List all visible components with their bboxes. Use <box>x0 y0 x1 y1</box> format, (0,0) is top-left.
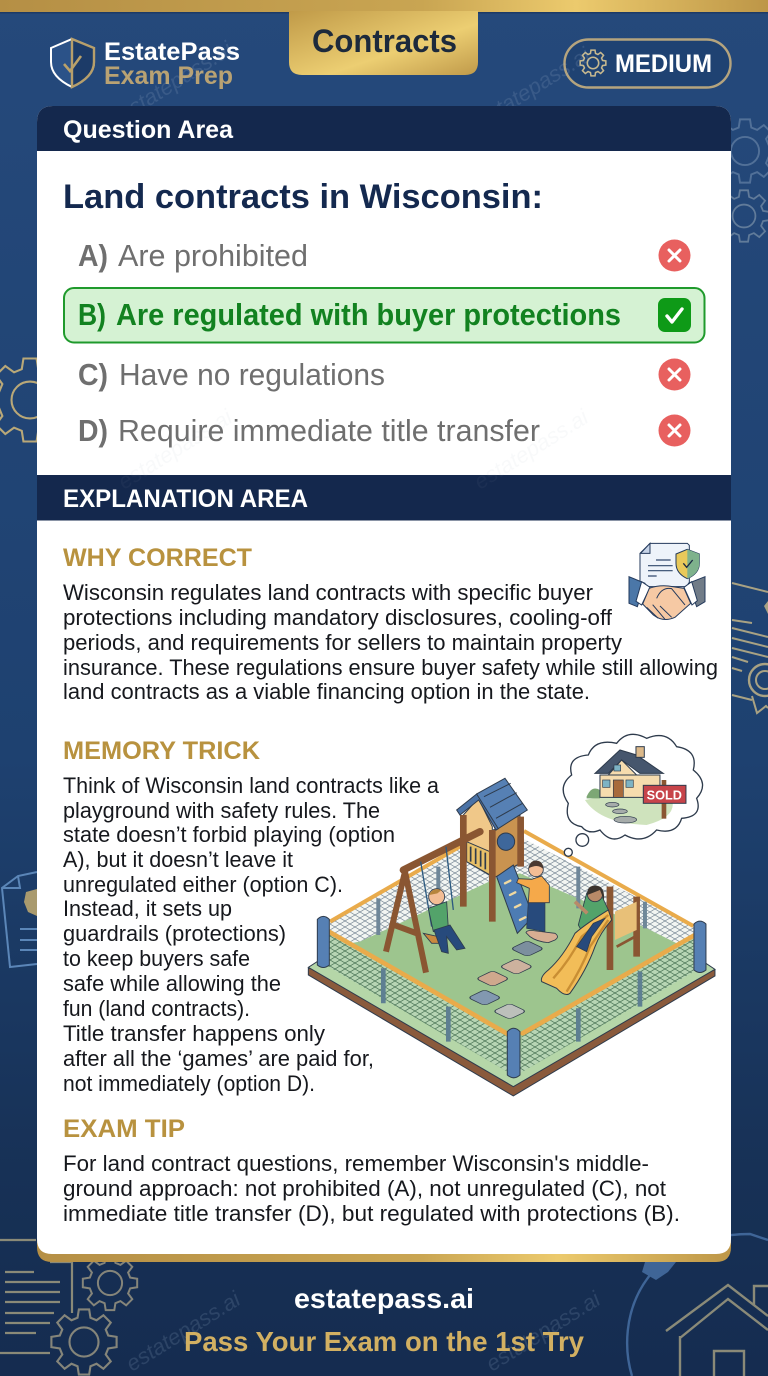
icon: correct <box>658 298 691 332</box>
text: exam tip: immediate title transfer (D), but regulated with protections (B). <box>63 1201 680 1226</box>
faint watermarks on panel: estatepass.ai <box>113 404 238 494</box>
text: memory trick: not immediately (option D). <box>63 1071 315 1096</box>
person on wall <box>517 861 557 943</box>
explanation area header <box>37 475 731 520</box>
option A: Are prohibited <box>118 238 308 273</box>
climbing wall <box>497 865 533 933</box>
slide and climber <box>541 886 637 995</box>
text: memory trick: state doesn’t forbid playing (option <box>63 822 395 847</box>
top gold bar <box>0 0 768 14</box>
text: memory trick: to keep buyers safe <box>63 946 250 971</box>
icon: wrong <box>658 240 690 272</box>
gold panel base <box>37 1230 731 1262</box>
option B correct <box>64 288 704 342</box>
option A <box>78 238 690 273</box>
option B correct: B) <box>78 297 106 332</box>
footer website: estatepass.ai <box>294 1283 474 1314</box>
question area header: Question Area <box>63 116 234 144</box>
option D: D) <box>78 413 108 448</box>
heading: memory trick: MEMORY TRICK <box>63 737 260 765</box>
watermarks on background: estatepass.ai <box>121 1286 246 1376</box>
tower roof <box>457 778 527 830</box>
brand logo <box>51 38 240 90</box>
thought bubble <box>563 734 703 856</box>
swing set <box>386 832 480 973</box>
option C: C) <box>78 357 108 392</box>
icon: wrong <box>658 358 690 390</box>
text: memory trick: guardrails (protections) <box>63 921 286 946</box>
icon: handshake and contract <box>629 543 705 620</box>
watermarks on background: estatepass.ai <box>471 42 596 132</box>
text: why correct: periods, and requirements for sellers to maintain property <box>63 630 623 655</box>
heading: why correct: WHY CORRECT <box>63 544 252 572</box>
text: why correct: insurance. These regulations ensure buyer safety while still allowing <box>63 655 718 680</box>
text: memory trick: Think of Wisconsin land contracts like a <box>63 773 439 798</box>
back fence <box>330 831 697 953</box>
difficulty badge: MEDIUM <box>615 50 712 78</box>
footer tagline: Pass Your Exam on the 1st Try <box>184 1326 584 1357</box>
text: why correct: Wisconsin regulates land contracts with specific buyer <box>63 580 593 605</box>
text: memory trick: after all the ‘games’ are paid for, <box>63 1046 374 1071</box>
text: memory trick: A), but it doesn’t leave it <box>63 847 294 872</box>
text: why correct <box>63 580 718 704</box>
brand name: EstatePass <box>104 38 240 66</box>
option B correct: Are regulated with buyer protections <box>116 297 621 332</box>
text: memory trick: fun (land contracts). <box>63 996 250 1021</box>
text: exam tip: For land contract questions, remember Wisconsin's middle- <box>63 1151 649 1176</box>
icon: shield <box>51 39 94 87</box>
front fence <box>326 930 700 1073</box>
faint watermarks on panel <box>113 404 594 494</box>
heading: exam tip: EXAM TIP <box>63 1115 185 1143</box>
text: memory trick: Instead, it sets up <box>63 896 232 921</box>
watermarks on background <box>113 36 606 1376</box>
question area header <box>37 106 731 151</box>
option A: A) <box>78 238 108 273</box>
illustration: fenced playground <box>308 734 715 1096</box>
category tab <box>289 11 478 75</box>
text: exam tip <box>63 1151 680 1226</box>
faint watermarks on panel: estatepass.ai <box>469 404 594 494</box>
text: memory trick: playground with safety rules. The <box>63 798 380 823</box>
brand subtitle: Exam Prep <box>104 62 233 90</box>
panel: question and explanation <box>37 106 731 1254</box>
question title: Land contracts in Wisconsin: <box>63 178 543 216</box>
play tower <box>457 778 527 922</box>
category tab: Contracts <box>312 23 457 59</box>
text: memory trick: unregulated either (option C). <box>63 872 343 897</box>
footer <box>184 1283 584 1357</box>
thought bubble: SOLD <box>647 788 682 802</box>
watermarks on background: estatepass.ai <box>481 1286 606 1376</box>
option C <box>78 357 690 392</box>
option C: Have no regulations <box>119 357 385 392</box>
watermarks on background: estatepass.ai <box>113 36 238 126</box>
stepping stones <box>468 941 544 1019</box>
text: exam tip: ground approach: not prohibited (A), not unregulated (C), not <box>63 1176 667 1201</box>
text: why correct: land contracts as a viable financing option in the state. <box>63 679 590 704</box>
playground base <box>308 835 715 1096</box>
text: memory trick: Title transfer happens only <box>63 1021 326 1046</box>
fence posts <box>317 916 706 1078</box>
text: why correct: protections including mandatory disclosures, cooling-off <box>63 605 613 630</box>
icon: wrong <box>658 414 690 446</box>
option D: Require immediate title transfer <box>118 413 540 448</box>
explanation area header: EXPLANATION AREA <box>63 485 308 513</box>
text: memory trick: safe while allowing the <box>63 971 281 996</box>
text: memory trick <box>63 773 439 1096</box>
difficulty badge <box>564 40 730 88</box>
icon: gear <box>580 50 606 76</box>
